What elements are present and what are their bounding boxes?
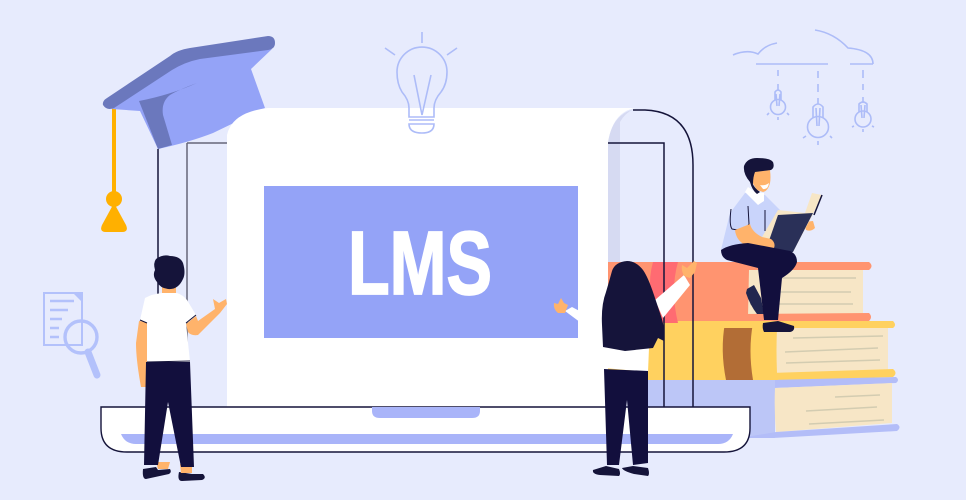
laptop screen outline: [158, 110, 693, 408]
scroll curl shade: [608, 109, 634, 262]
book: yellow middle: [608, 321, 896, 380]
person: woman in centre: [554, 261, 697, 476]
person: man reading on books: [721, 158, 822, 332]
book: orange top: [608, 262, 872, 323]
person: man on left: [136, 255, 227, 481]
scroll page: [227, 108, 635, 408]
bulb: right: [852, 102, 874, 132]
bulb: middle: [803, 104, 832, 145]
bulb: left: [767, 90, 789, 120]
icon: document with magnifier: [44, 292, 97, 375]
icon: large light bulb: [385, 32, 457, 133]
screen panel: [264, 186, 578, 338]
laptop base: [101, 407, 750, 452]
book: blue bottom: [640, 377, 900, 438]
title: LMS: LMS: [348, 214, 492, 314]
icon: graduation cap: [101, 36, 275, 232]
book stack: [608, 262, 900, 438]
icon: cloud with hanging bulbs: [733, 30, 874, 145]
